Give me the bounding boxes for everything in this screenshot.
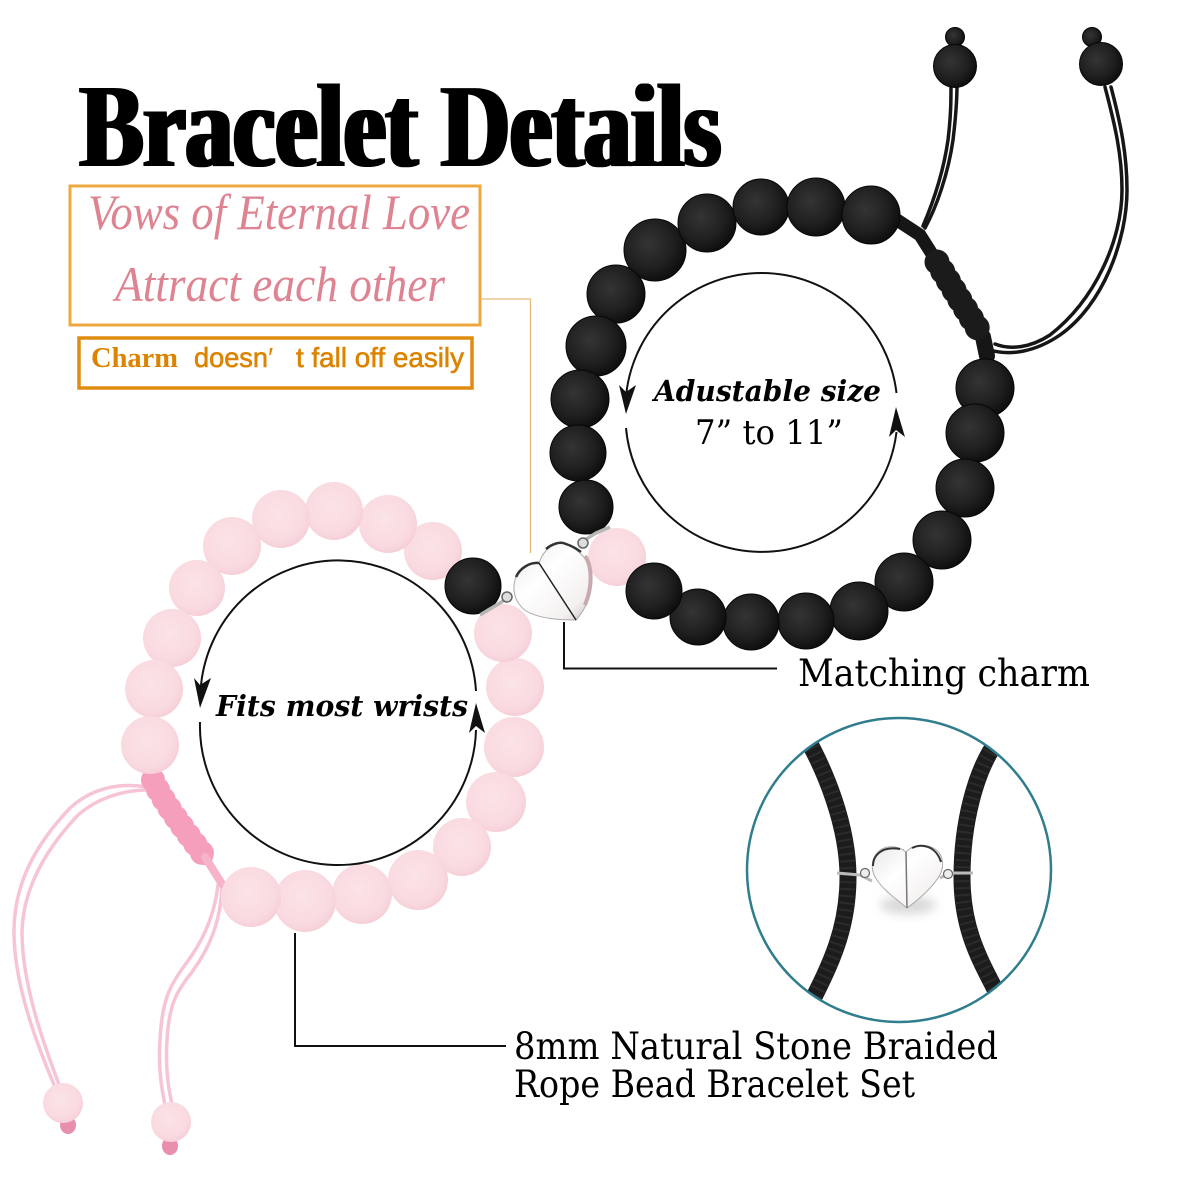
callout: vows of eternal love: Vows of Eternal Love xyxy=(88,184,470,240)
pink bead beside charm xyxy=(474,604,532,662)
label: matching charm: Matching charm xyxy=(798,652,1090,695)
callout: charm doesn't fall off easily xyxy=(79,338,472,388)
fits most wrists ring: Fits most wrists xyxy=(215,689,468,723)
callout: charm doesn't fall off easily: ′ xyxy=(268,342,273,373)
charm detail inset xyxy=(747,718,1051,1022)
leader line: callout to charm xyxy=(482,299,530,553)
callout: vows of eternal love xyxy=(70,184,480,325)
black bracelet cords and braid xyxy=(897,85,1127,356)
pink bracelet cords and braid xyxy=(14,780,222,1105)
black bracelet beads xyxy=(445,28,1122,650)
label: natural stone bracelet set xyxy=(514,1025,998,1106)
label: natural stone bracelet set: Rope Bead Bracelet Set xyxy=(514,1063,915,1106)
leader line: natural stone xyxy=(295,933,506,1046)
adjustable size ring: 7” to 11” xyxy=(695,413,843,453)
magnetic heart charm xyxy=(480,527,610,620)
leader line: matching charm xyxy=(564,622,777,668)
label: natural stone bracelet set: 8mm Natural Stone Braided xyxy=(514,1025,998,1068)
callout: charm doesn't fall off easily: t fall off easily xyxy=(296,342,464,373)
adjustable size ring: Adustable size xyxy=(651,374,881,408)
adjustable size ring xyxy=(619,273,905,552)
callout: charm doesn't fall off easily: Charm xyxy=(91,343,178,374)
callout: charm doesn't fall off easily: doesn xyxy=(194,342,268,373)
title: Bracelet Details xyxy=(80,60,721,192)
callout: vows of eternal love: Attract each other xyxy=(112,256,445,312)
fits most wrists ring xyxy=(194,560,485,865)
pink bracelet beads xyxy=(43,482,646,1155)
